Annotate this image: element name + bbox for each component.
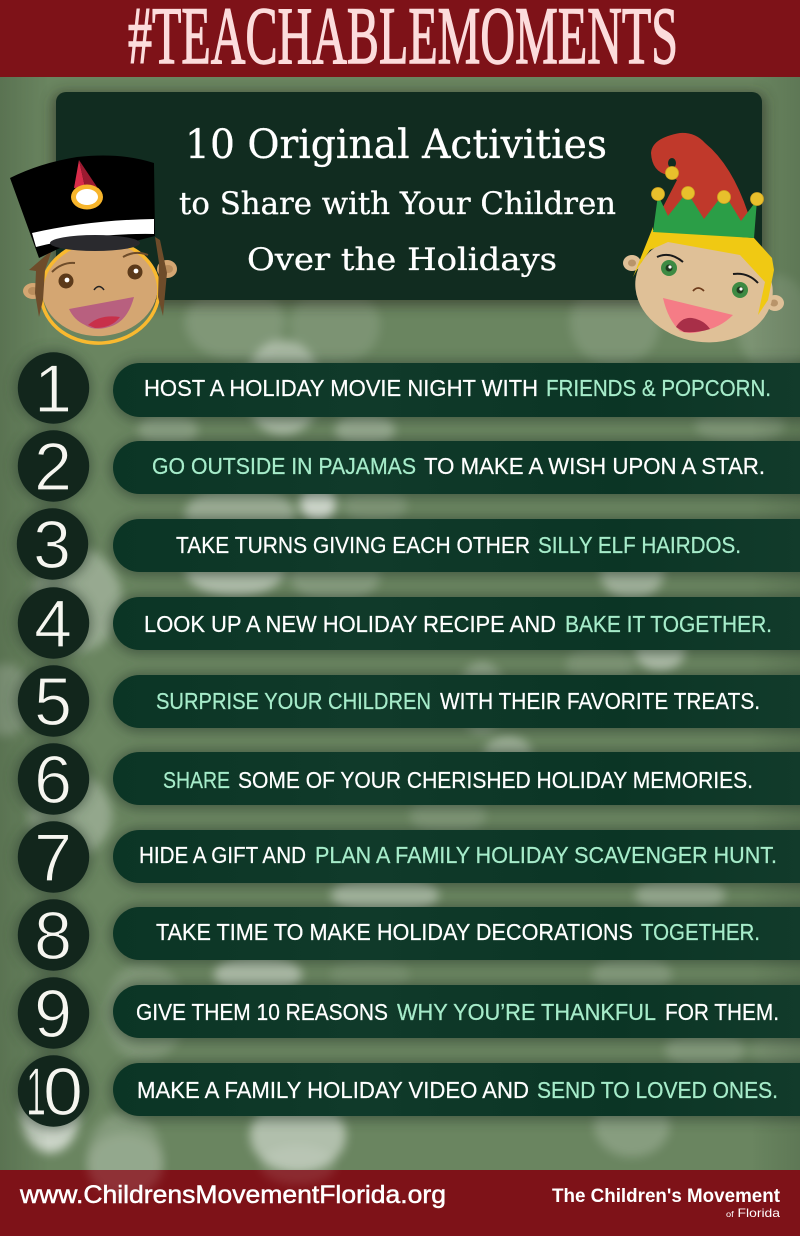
heading line 3: Over the Holidays	[247, 242, 557, 278]
pill 9: WHY YOU’RE THANKFUL	[397, 999, 656, 1025]
pill 5	[113, 675, 800, 728]
pill 4: BAKE IT TOGETHER.	[565, 611, 772, 637]
pill shadows	[15, 350, 800, 1129]
number 10: 1	[26, 1054, 46, 1130]
pill 7: HIDE A GIFT AND	[139, 842, 306, 868]
pill 4: LOOK UP A NEW HOLIDAY RECIPE AND	[144, 611, 556, 637]
number 3: 3	[33, 507, 71, 583]
panel: heading board	[56, 92, 762, 300]
pill 8: TAKE TIME TO MAKE HOLIDAY DECORATIONS	[156, 919, 633, 945]
pill 6	[113, 752, 800, 805]
pill 8	[113, 907, 800, 960]
activity 2	[18, 429, 800, 505]
number 2	[18, 429, 89, 505]
pill 1: HOST A HOLIDAY MOVIE NIGHT WITH	[144, 375, 538, 401]
number 9	[18, 976, 89, 1052]
number 8: 8	[34, 898, 72, 974]
number 1: 1	[34, 351, 72, 427]
activity 5	[18, 664, 800, 740]
activity 3	[17, 507, 800, 583]
number 3	[17, 507, 88, 583]
number 10: 0	[43, 1054, 83, 1130]
number 5	[18, 664, 89, 740]
pill 1	[113, 363, 800, 417]
footer band	[0, 1133, 800, 1236]
number 5: 5	[34, 664, 72, 740]
number 10	[18, 1054, 89, 1130]
pill 10: SEND TO LOVED ONES.	[537, 1077, 778, 1103]
heading line 2: to Share with Your Children	[179, 186, 616, 222]
number 7: 7	[34, 820, 72, 896]
number 7	[18, 820, 89, 896]
pill 3	[113, 519, 800, 572]
icon: elf character	[623, 133, 784, 351]
pill 4	[113, 597, 800, 650]
number 4: 4	[34, 586, 72, 662]
pill 10: MAKE A FAMILY HOLIDAY VIDEO AND	[137, 1077, 529, 1103]
activity 8	[18, 898, 800, 974]
website url: www.ChildrensMovementFlorida.org	[19, 1181, 446, 1209]
number 8	[18, 898, 89, 974]
activity 9	[18, 976, 800, 1052]
pill 1: FRIENDS & POPCORN.	[546, 375, 771, 401]
pill 2	[113, 441, 800, 494]
number 1	[18, 351, 89, 427]
pill 9: GIVE THEM 10 REASONS	[136, 999, 388, 1025]
number 6: 6	[34, 742, 72, 818]
pill 2: GO OUTSIDE IN PAJAMAS	[152, 453, 416, 479]
number 2: 2	[34, 429, 72, 505]
pill 2: TO MAKE A WISH UPON A STAR.	[424, 453, 765, 479]
pill 9: FOR THEM.	[665, 999, 779, 1025]
activity 6	[18, 742, 800, 818]
pill 6: SHARE	[163, 767, 230, 793]
organisation logo text	[552, 1185, 780, 1220]
pill 10	[113, 1063, 800, 1116]
header band	[0, 0, 800, 77]
pill 7	[113, 830, 800, 883]
activity 10	[18, 1054, 800, 1130]
pill 6: SOME OF YOUR CHERISHED HOLIDAY MEMORIES.	[238, 767, 753, 793]
number 6	[18, 742, 89, 818]
number 9: 9	[34, 976, 72, 1052]
organisation logo text: The Children's Movement	[552, 1185, 780, 1207]
pill 5: SURPRISE YOUR CHILDREN	[156, 688, 431, 714]
pill 9	[113, 985, 800, 1038]
organisation logo text: of Florida	[726, 1206, 780, 1220]
pill 5: WITH THEIR FAVORITE TREATS.	[440, 688, 760, 714]
heading line 1: 10 Original Activities	[185, 122, 607, 168]
number 4	[18, 586, 89, 662]
activity 4	[18, 586, 800, 662]
icon: nutcracker character	[10, 155, 177, 348]
pill 8: TOGETHER.	[641, 919, 760, 945]
activity 1	[18, 351, 800, 427]
pill 3: SILLY ELF HAIRDOS.	[538, 532, 741, 558]
pill 3: TAKE TURNS GIVING EACH OTHER	[176, 532, 530, 558]
activity 7	[18, 820, 800, 896]
panel shadow	[52, 92, 766, 306]
